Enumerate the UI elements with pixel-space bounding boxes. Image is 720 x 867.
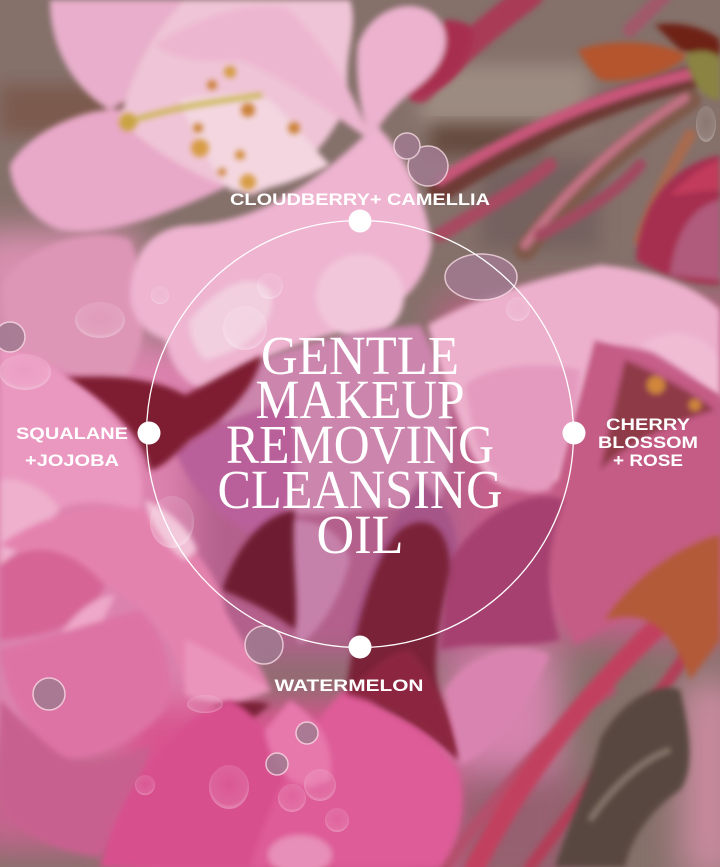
node: right (562, 422, 586, 444)
label: cherry blossom + rose: + ROSE (613, 451, 683, 470)
node: bottom (348, 636, 372, 658)
title (218, 325, 502, 565)
title: OIL (316, 504, 404, 565)
label: cherry blossom + rose (598, 415, 698, 470)
node: left (138, 422, 160, 444)
title: REMOVING (226, 414, 494, 475)
node: top (348, 210, 372, 232)
label: squalane + jojoba: SQUALANE (16, 424, 128, 443)
photo: right tilted red stems (445, 615, 690, 867)
label: cherry blossom + rose: BLOSSOM (598, 433, 698, 452)
photo: crimson bud at right (636, 155, 720, 285)
title: MAKEUP (256, 369, 464, 430)
title: GENTLE (261, 325, 459, 386)
photo: blurred stems at upper right (420, 0, 690, 250)
photo: orange sepal and green calyx (578, 24, 720, 100)
label: squalane + jojoba: +JOJOBA (25, 451, 119, 470)
photo: pink blur petal lower mid (445, 648, 550, 765)
photo: left mid pink petal (3, 235, 144, 381)
photo: centre pale petal (130, 125, 432, 390)
photo: mauve petals behind the title (175, 325, 457, 650)
label: squalane + jojoba (16, 424, 128, 470)
label: cloudberry + camellia: CLOUDBERRY+ CAMELLIA (230, 190, 490, 209)
circle diagram (138, 210, 586, 658)
photo: dark crimson bud bases (60, 355, 460, 760)
photo: right deep pink lower petals (440, 340, 720, 650)
photo: right large pale petal (428, 265, 720, 493)
photo: woody branch (555, 687, 689, 867)
photo: stamens (119, 66, 300, 190)
label: watermelon: WATERMELON (274, 676, 424, 695)
ring (146, 220, 574, 648)
title: CLEANSING (218, 459, 502, 520)
photo: bottom bud petals (100, 650, 462, 867)
photo: orange sepals at right (605, 535, 720, 680)
label: cherry blossom + rose: CHERRY (606, 415, 691, 434)
photo: left flower petals (0, 349, 272, 857)
photo underpaint: soft colour masses (0, 230, 720, 867)
photo: upper flower petals (10, 0, 474, 232)
